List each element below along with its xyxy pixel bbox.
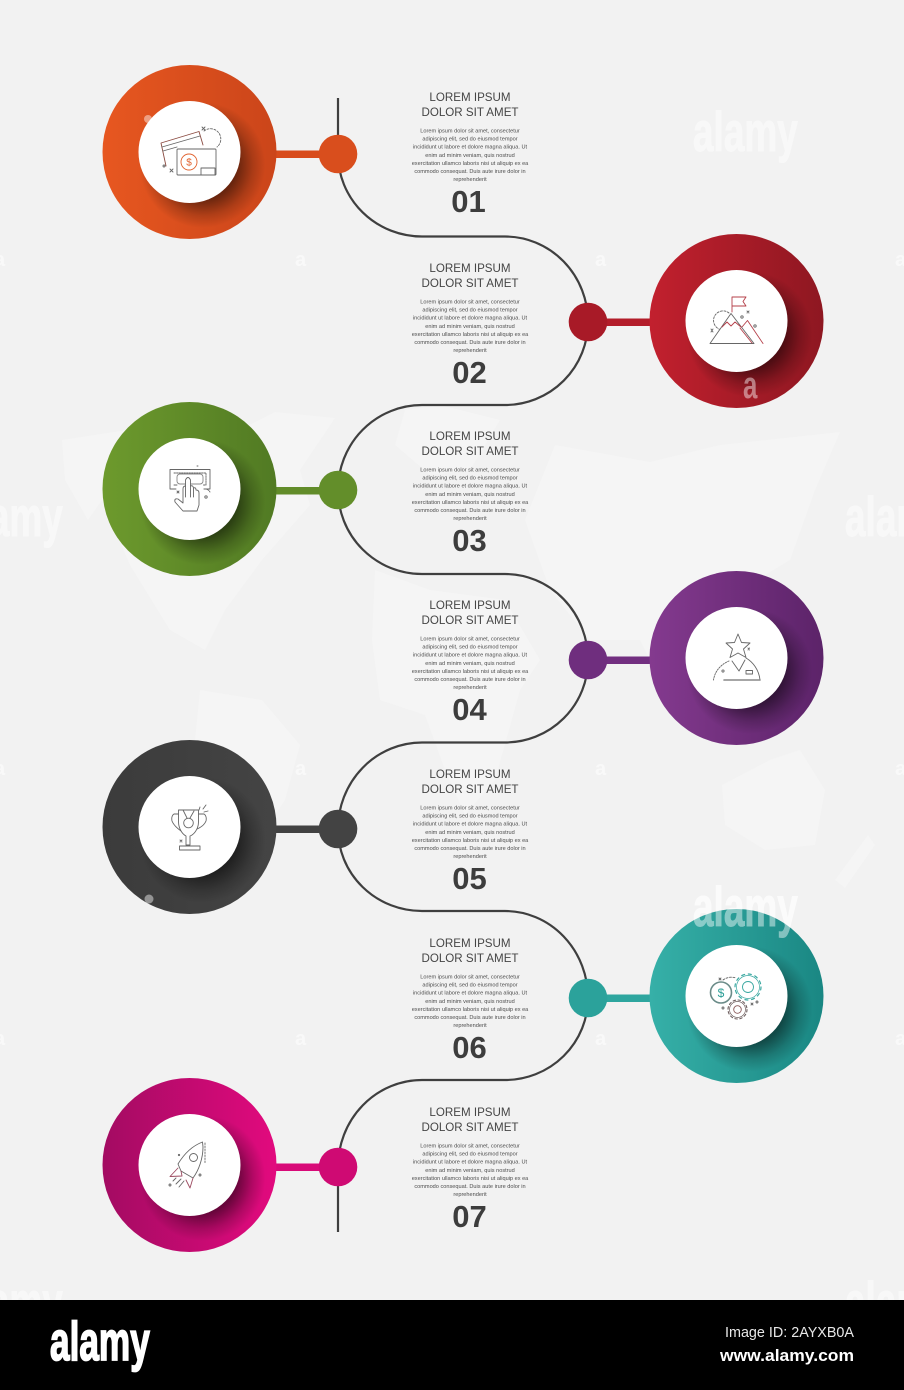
- ring watermark specks: a: [743, 364, 758, 406]
- heading 01: DOLOR SIT AMET: [421, 106, 519, 119]
- body 04: reprehenderit: [453, 685, 487, 691]
- body 01: incididunt ut labore et dolore magna aliqua. Ut: [413, 145, 528, 151]
- timeline dot 02: [569, 303, 607, 341]
- ring shadow 06: [691, 952, 808, 1068]
- body 03: incididunt ut labore et dolore magna aliqua. Ut: [413, 484, 528, 490]
- body 06: reprehenderit: [453, 1023, 487, 1029]
- timeline dot 06: [569, 979, 607, 1017]
- heading 05: LOREM IPSUM: [429, 768, 511, 781]
- connector 06: [600, 994, 655, 1002]
- small watermark letters: a: [295, 758, 307, 780]
- small watermark letters: a: [595, 1028, 607, 1050]
- heading 06: LOREM IPSUM: [429, 937, 511, 950]
- white disc 02: [686, 270, 788, 372]
- body 02: incididunt ut labore et dolore magna aliqua. Ut: [413, 316, 528, 322]
- heading 03: LOREM IPSUM: [429, 430, 511, 443]
- step 05 text: [412, 768, 529, 896]
- body 06: Lorem ipsum dolor sit amet, consectetur: [420, 974, 520, 980]
- step 06 text: [412, 937, 529, 1065]
- step 07 text: [412, 1106, 529, 1234]
- body 07: enim ad minim veniam, quis nostrud: [425, 1168, 515, 1174]
- body 01: adipiscing elit, sed do eiusmod tempor: [422, 137, 518, 143]
- watermarks: alamy: [693, 101, 798, 164]
- body 02: reprehenderit: [453, 348, 487, 354]
- ring 05: [102, 740, 276, 914]
- image id: Image ID: 2AYXB0A: [725, 1324, 854, 1341]
- footer logo: alamy: [50, 1310, 150, 1372]
- heading 05: DOLOR SIT AMET: [421, 783, 519, 796]
- body 01: exercitation ullamco laboris nisi ut aliquip ex ea: [412, 161, 529, 167]
- connector 02: [600, 318, 655, 326]
- step 03 text: [412, 430, 529, 558]
- ring 06: [650, 909, 824, 1083]
- body 07: incididunt ut labore et dolore magna aliqua. Ut: [413, 1160, 528, 1166]
- number 03: 03: [452, 523, 487, 558]
- body 05: exercitation ullamco laboris nisi ut aliquip ex ea: [412, 838, 529, 844]
- icon: gears and dollar coin: $: [718, 986, 725, 1000]
- icon: trophy: [172, 805, 208, 850]
- connector 01: [270, 150, 325, 158]
- heading 04: DOLOR SIT AMET: [421, 614, 519, 627]
- body 04: adipiscing elit, sed do eiusmod tempor: [422, 645, 518, 651]
- heading 04: LOREM IPSUM: [429, 599, 511, 612]
- icon: rocket: [169, 1142, 205, 1188]
- heading 02: LOREM IPSUM: [429, 262, 511, 275]
- body 06: incididunt ut labore et dolore magna aliqua. Ut: [413, 991, 528, 997]
- body 06: exercitation ullamco laboris nisi ut aliquip ex ea: [412, 1007, 529, 1013]
- body 02: enim ad minim veniam, quis nostrud: [425, 324, 515, 330]
- body 07: reprehenderit: [453, 1192, 487, 1198]
- number 01: 01: [451, 184, 486, 219]
- body 02: Lorem ipsum dolor sit amet, consectetur: [420, 300, 520, 306]
- body 05: enim ad minim veniam, quis nostrud: [425, 830, 515, 836]
- ring 02: [650, 234, 824, 408]
- body 03: adipiscing elit, sed do eiusmod tempor: [422, 476, 518, 482]
- icon: mountain with flag: [710, 297, 763, 344]
- body 04: commodo consequat. Duis aute irure dolor in: [414, 677, 526, 683]
- icon: hand on banknote: [170, 466, 210, 511]
- heading 01: LOREM IPSUM: [429, 91, 511, 104]
- body 02: adipiscing elit, sed do eiusmod tempor: [422, 308, 518, 314]
- ring 03: [102, 402, 276, 576]
- world map backdrop: [62, 405, 875, 900]
- body 05: commodo consequat. Duis aute irure dolor in: [414, 846, 526, 852]
- ring watermark specks: [144, 115, 798, 939]
- watermarks: alamy: [693, 876, 798, 939]
- ring shadow 02: [690, 276, 808, 394]
- step 02 node: red: [569, 234, 824, 408]
- heading 03: DOLOR SIT AMET: [421, 445, 519, 458]
- number 05: 05: [452, 861, 487, 896]
- body 03: reprehenderit: [453, 516, 487, 522]
- step 05 node: charcoal: [102, 740, 357, 914]
- number 07: 07: [452, 1199, 487, 1234]
- ring shadow 05: [156, 792, 256, 894]
- timeline dot 07: [319, 1148, 357, 1186]
- small watermark letters: [0, 249, 904, 1050]
- number 06: 06: [452, 1030, 487, 1065]
- body 03: Lorem ipsum dolor sit amet, consectetur: [420, 468, 520, 474]
- white disc 03: [138, 438, 240, 540]
- body 04: enim ad minim veniam, quis nostrud: [425, 661, 515, 667]
- connector 07: [270, 1164, 325, 1171]
- connector 03: [270, 487, 325, 494]
- website: www.alamy.com: [719, 1346, 854, 1365]
- body 05: Lorem ipsum dolor sit amet, consectetur: [420, 806, 520, 812]
- body 05: adipiscing elit, sed do eiusmod tempor: [422, 814, 518, 820]
- ring 01: [102, 65, 276, 239]
- connector 04: [600, 656, 655, 664]
- body 06: commodo consequat. Duis aute irure dolor in: [414, 1015, 526, 1021]
- number 02: 02: [452, 355, 487, 390]
- icon: credit cards and dollar: [161, 127, 221, 175]
- white disc 07: [138, 1114, 240, 1216]
- ring 07: [102, 1078, 276, 1252]
- timeline dot 04: [569, 641, 607, 679]
- ring 04: [650, 571, 824, 745]
- body 05: incididunt ut labore et dolore magna aliqua. Ut: [413, 822, 528, 828]
- heading 06: DOLOR SIT AMET: [421, 952, 519, 965]
- body 03: exercitation ullamco laboris nisi ut aliquip ex ea: [412, 500, 529, 506]
- white disc 06: [686, 945, 788, 1047]
- body 07: Lorem ipsum dolor sit amet, consectetur: [420, 1144, 520, 1150]
- icon: gears and dollar coin: [710, 974, 761, 1019]
- winding timeline path: [338, 98, 588, 1232]
- body 06: adipiscing elit, sed do eiusmod tempor: [422, 983, 518, 989]
- body 04: exercitation ullamco laboris nisi ut aliquip ex ea: [412, 669, 529, 675]
- step 01 node: orange: [102, 65, 357, 239]
- heading 07: LOREM IPSUM: [429, 1106, 511, 1119]
- icon: credit cards and dollar: $: [186, 158, 192, 168]
- body 02: exercitation ullamco laboris nisi ut aliquip ex ea: [412, 332, 529, 338]
- body 01: reprehenderit: [453, 177, 487, 183]
- number 04: 04: [452, 692, 487, 727]
- connector 05: [270, 826, 325, 833]
- white disc 01: [138, 101, 240, 203]
- timeline dot 01: [319, 135, 357, 173]
- step 04 node: purple: [569, 571, 824, 745]
- ring shadow 07: [144, 1118, 263, 1238]
- body 01: Lorem ipsum dolor sit amet, consectetur: [420, 128, 520, 134]
- timeline dot 03: [319, 471, 357, 509]
- body 07: exercitation ullamco laboris nisi ut aliquip ex ea: [412, 1176, 529, 1182]
- timeline dot 05: [319, 810, 357, 848]
- body 05: reprehenderit: [453, 854, 487, 860]
- ring shadow 01: [143, 106, 262, 225]
- heading 02: DOLOR SIT AMET: [421, 277, 519, 290]
- body 06: enim ad minim veniam, quis nostrud: [425, 999, 515, 1005]
- body 03: commodo consequat. Duis aute irure dolor in: [414, 508, 526, 514]
- body 07: adipiscing elit, sed do eiusmod tempor: [422, 1152, 518, 1158]
- step 04 text: [412, 599, 529, 727]
- ring shadow 04: [692, 616, 807, 729]
- ring shadow 03: [145, 445, 260, 560]
- heading 07: DOLOR SIT AMET: [421, 1121, 519, 1134]
- body 01: enim ad minim veniam, quis nostrud: [425, 153, 515, 159]
- small watermark letters: a: [595, 758, 607, 780]
- small watermark letters: a: [595, 249, 607, 271]
- step 06 node: teal: [569, 909, 824, 1083]
- white disc 04: [686, 607, 788, 709]
- step 01 text: [412, 91, 529, 219]
- body 01: commodo consequat. Duis aute irure dolor in: [414, 169, 526, 175]
- white disc 05: [138, 776, 240, 878]
- small watermark letters: a: [295, 249, 307, 271]
- step 03 node: green: [102, 402, 357, 576]
- ring watermark specks: alamy: [693, 876, 798, 939]
- footer bar: [0, 1300, 904, 1390]
- icon: star above figure: [714, 634, 760, 680]
- step 07 node: magenta: [102, 1078, 357, 1252]
- small watermark letters: a: [295, 1028, 307, 1050]
- body 03: enim ad minim veniam, quis nostrud: [425, 492, 515, 498]
- body 02: commodo consequat. Duis aute irure dolor in: [414, 340, 526, 346]
- step 02 text: [412, 262, 529, 390]
- body 04: incididunt ut labore et dolore magna aliqua. Ut: [413, 653, 528, 659]
- body 07: commodo consequat. Duis aute irure dolor in: [414, 1184, 526, 1190]
- body 04: Lorem ipsum dolor sit amet, consectetur: [420, 636, 520, 642]
